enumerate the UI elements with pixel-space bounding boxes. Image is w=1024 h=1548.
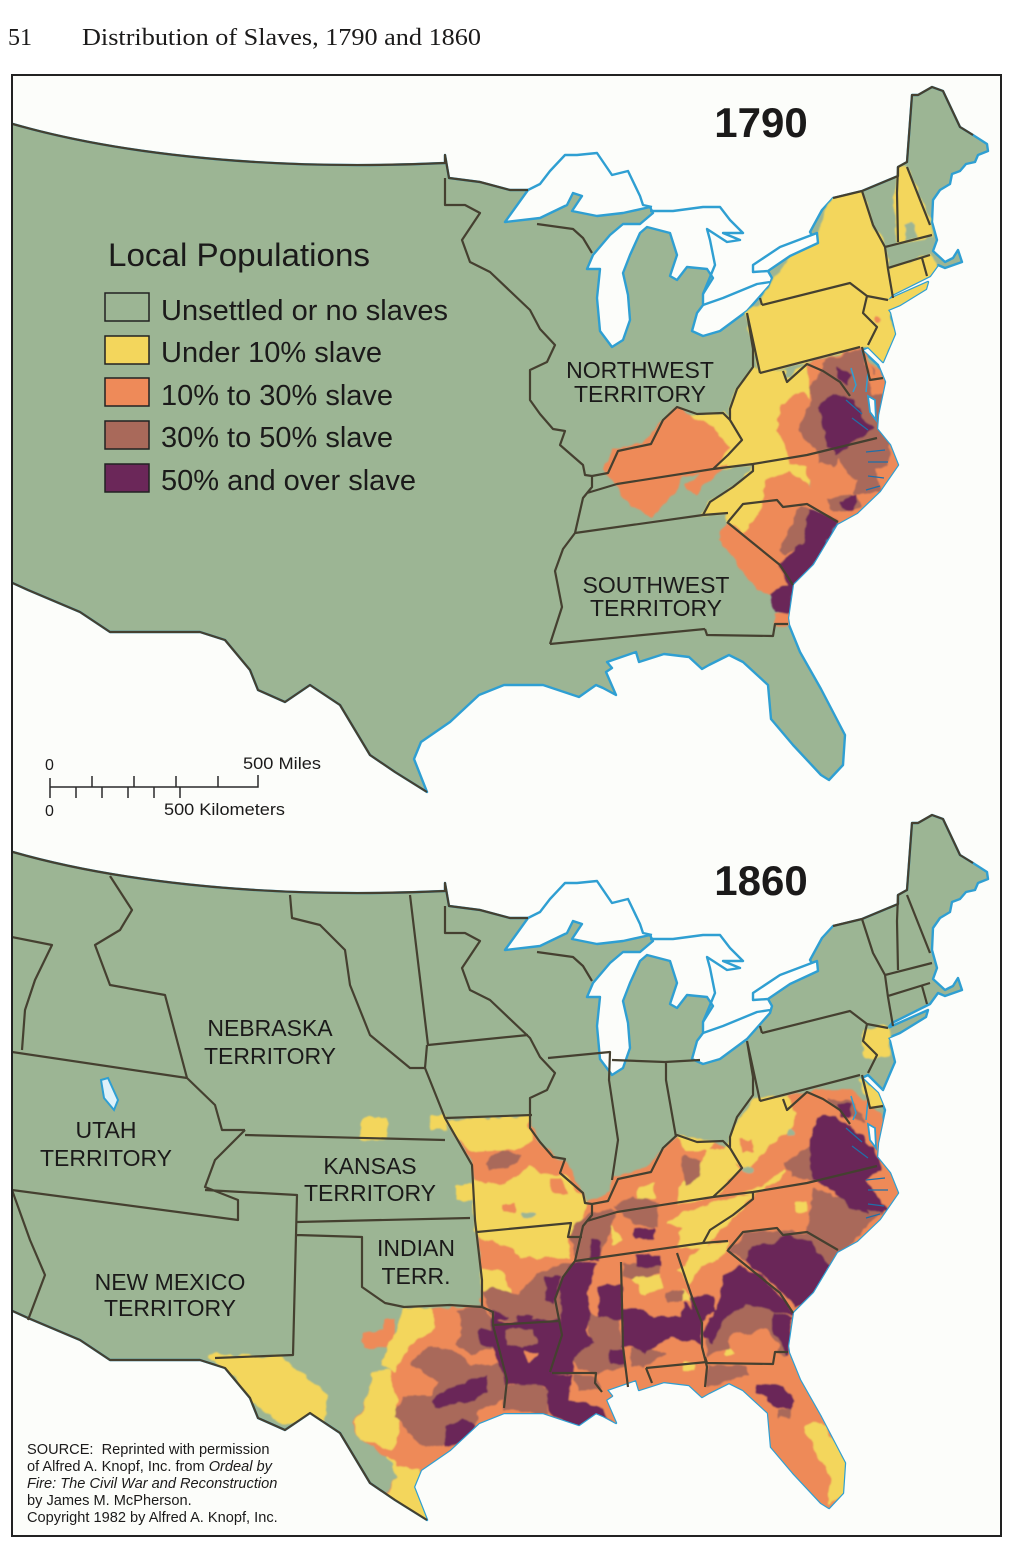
coast, lakes and shared borders 1860 [6,815,973,1520]
legend: 30-50%: 30% to 50% slave [161,422,393,454]
source note: Copyright 1982 by Alfred A. Knopf, Inc. [27,1510,278,1526]
map: 1790 [6,87,988,792]
label: Kansas Territory: TERRITORY [304,1180,436,1206]
year 1860: 1860 [714,857,808,904]
source note: by James M. McPherson. [27,1493,192,1509]
legend: unsettled: Unsettled or no slaves [161,295,448,327]
great salt lake [101,1078,118,1110]
page number and title: Distribution of Slaves, 1790 and 1860 [82,25,481,51]
southwest territory south border [550,629,705,644]
label: Southwest Territory: SOUTHWEST [583,572,729,598]
legend heading: Local Populations [108,237,370,273]
scale bar [45,754,321,820]
slave population shading 1790 [603,167,940,624]
source note: Fire: The Civil War and Reconstruction [27,1476,277,1492]
legend [105,237,448,497]
label: Indian Territory: INDIAN [377,1235,455,1261]
scale bar: 0 [45,757,54,774]
legend: 50% and over: 50% and over slave [161,465,416,497]
state and territory borders 1860 [12,876,707,1408]
land base 1790 [6,87,988,792]
label: New Mexico Territory: NEW MEXICO [95,1269,245,1295]
label: Northwest Territory: NORTHWEST [566,357,714,383]
label: Indian Territory: TERR. [382,1263,450,1289]
label: Utah Territory: UTAH [76,1117,136,1143]
scale bar: 500 Miles [243,754,321,773]
label: New Mexico Territory: TERRITORY [104,1295,236,1321]
label: Northwest Territory: TERRITORY [574,381,706,407]
label: Southwest Territory: TERRITORY [590,595,722,621]
year 1790: 1790 [714,99,808,146]
source note: of Alfred A. Knopf, Inc. from Ordeal by [27,1459,272,1475]
page number and title: 51 [8,25,32,51]
label: Nebraska Territory: TERRITORY [204,1043,336,1069]
scale bar: 0 [45,803,54,820]
scale bar: 500 Kilometers [164,800,285,819]
map: 1860 [6,815,988,1527]
slave population shading 1860 [212,1028,907,1527]
label: Nebraska Territory: NEBRASKA [207,1015,333,1041]
label: Utah Territory: TERRITORY [40,1145,172,1171]
source note: SOURCE: Reprinted with permission [27,1442,270,1458]
coast, lakes and borders 1790 [6,87,973,792]
legend: under 10%: Under 10% slave [161,337,382,369]
legend: 10-30%: 10% to 30% slave [161,380,393,412]
label: Kansas Territory: KANSAS [323,1153,417,1179]
land base 1860 [6,815,988,1520]
